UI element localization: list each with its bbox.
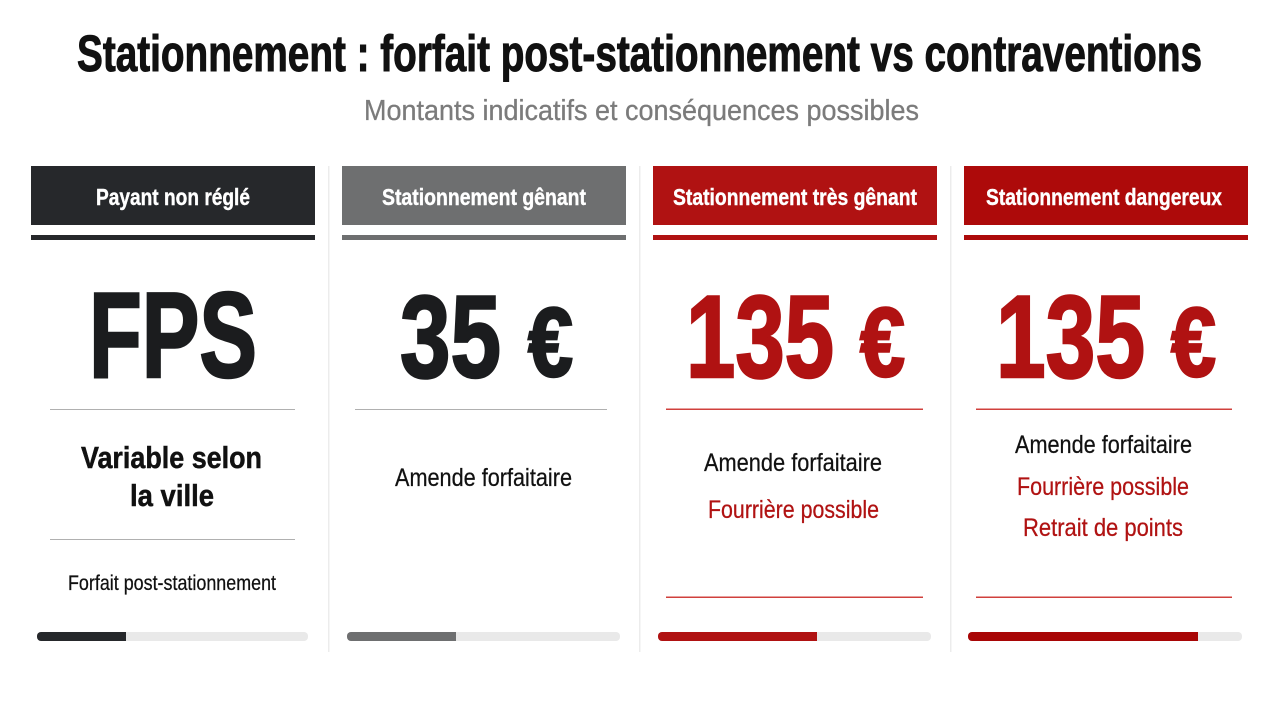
header: payant non réglé: Payant non réglé <box>96 184 250 210</box>
consequences: Amende forfaitaire <box>704 449 882 477</box>
big value: 135 €: € <box>1171 287 1216 397</box>
severity bar <box>658 632 931 641</box>
header: stationnement très gênant: Stationnement très gênant <box>673 184 917 210</box>
severity bar <box>37 632 308 641</box>
big value: FPS: FPS <box>89 267 257 403</box>
big value: 35 €: 35 <box>400 271 501 402</box>
header: stationnement dangereux: Stationnement dangereux <box>986 184 1222 210</box>
big value: 135 €: 135 <box>686 271 834 402</box>
header: stationnement gênant: Stationnement gênant <box>382 184 586 210</box>
header: stationnement gênant <box>342 166 626 240</box>
big value: 135 €: € <box>860 287 905 397</box>
consequences: Amende forfaitaire <box>1015 431 1192 459</box>
severity bar <box>347 632 620 641</box>
panel: stationnement gênant <box>342 166 626 641</box>
description: amende forfaitaire: Amende forfaitaire <box>395 464 572 492</box>
consequences <box>1015 431 1192 542</box>
consequences <box>704 449 882 524</box>
variable note: la ville <box>130 478 214 513</box>
consequences: Retrait de points <box>1023 514 1183 542</box>
header: stationnement très gênant <box>653 166 937 240</box>
variable note: Variable selon <box>81 440 262 475</box>
description: forfait post-stationnement: Forfait post-stationnement <box>68 572 276 595</box>
header: payant non réglé <box>31 166 315 240</box>
panel: stationnement dangereux <box>964 166 1248 641</box>
consequences: Fourrière possible <box>1017 473 1189 501</box>
panel: stationnement très gênant <box>653 166 937 641</box>
subtitle: Montants indicatifs et conséquences possibles <box>364 95 919 127</box>
big value: 35 €: € <box>528 287 573 397</box>
panel: payant non réglé <box>31 166 315 641</box>
variable note <box>81 440 262 513</box>
consequences: Fourrière possible <box>708 496 879 524</box>
header: stationnement dangereux <box>964 166 1248 240</box>
big value: 135 €: 135 <box>996 271 1145 402</box>
severity bar <box>968 632 1242 641</box>
